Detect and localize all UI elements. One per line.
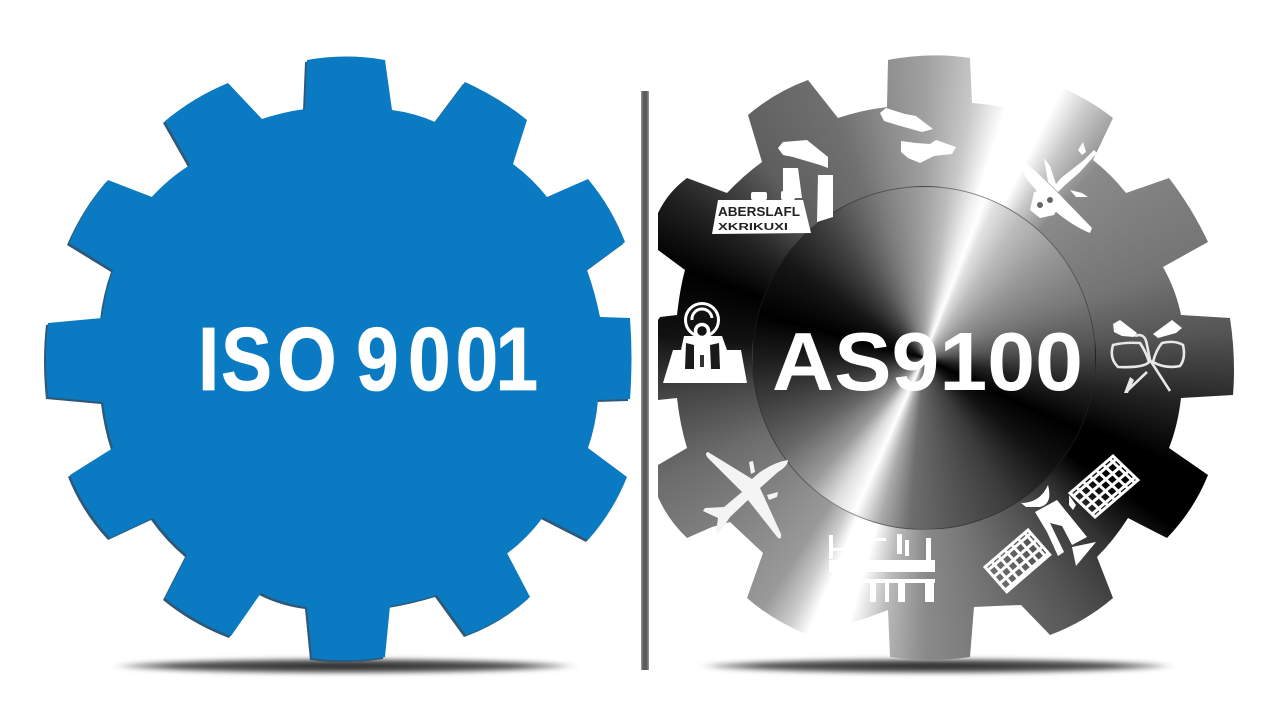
label: ISO 9001: ISO 9001 <box>198 308 538 409</box>
gear: AS9100 metallic <box>658 55 1234 660</box>
icon: aircraft upper right <box>1016 142 1097 233</box>
icon: airplane <box>703 452 788 538</box>
icon: factory: ABERSLAFL <box>718 204 800 219</box>
lower solar panel <box>985 530 1050 592</box>
divider line <box>641 91 649 670</box>
icon: factory <box>712 140 833 234</box>
icon: building bottom <box>829 534 935 602</box>
icon: radar tower <box>663 304 747 383</box>
label: AS9100: AS9100 <box>772 315 1083 408</box>
icon: crossed tools <box>1112 320 1184 393</box>
icon: ship top <box>880 108 956 163</box>
icon: satellite <box>985 456 1138 592</box>
icon: factory: XKRIKUXI <box>718 222 788 233</box>
upper solar panel <box>1070 456 1138 517</box>
inner metallic disc <box>752 186 1096 530</box>
